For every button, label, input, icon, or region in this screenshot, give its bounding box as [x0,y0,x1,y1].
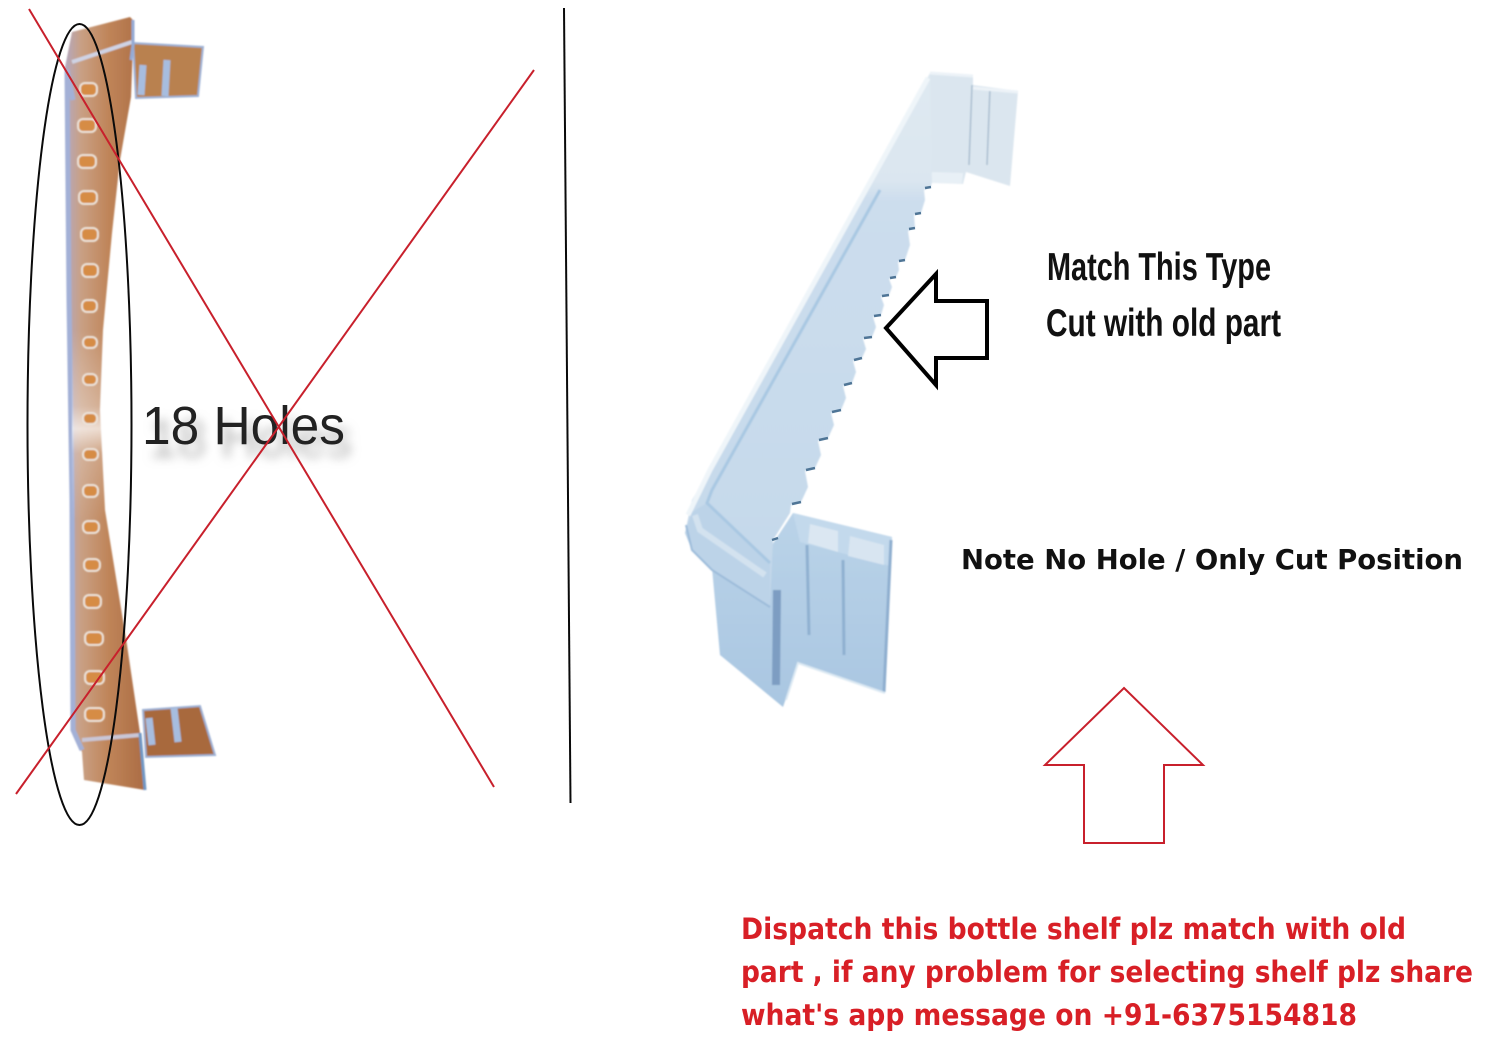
shelf holes [78,83,104,721]
black ellipse around holes [28,24,132,825]
red dispatch message: Dispatch this bottle shelf plz match with old [741,912,1406,946]
red dispatch message [741,912,1473,1032]
arrow: red arrow pointing up [1045,688,1203,843]
heading: match this type: Match This Type [1047,246,1271,289]
red dispatch message: what's app message on +91-6375154818 [741,998,1357,1032]
red cross-out [16,9,534,794]
photo: brown-tinted shelf with holes [65,17,215,790]
main notched strip [685,73,932,607]
photo: clear blue shelf with cut edge [685,73,1018,707]
heading: match this type [1046,246,1281,345]
arrow: black arrow pointing at cut edge [886,274,987,385]
label: 18 Holes: 18 Holes [142,396,345,456]
upper clip body [925,73,1018,186]
cut notches [772,187,931,540]
panel: rejected 18-hole shelf [16,9,534,825]
heading: match this type: Cut with old part [1046,302,1281,345]
lower clip body [712,513,892,707]
vertical divider line [564,8,570,803]
note text: Note No Hole / Only Cut Position [961,543,1463,576]
